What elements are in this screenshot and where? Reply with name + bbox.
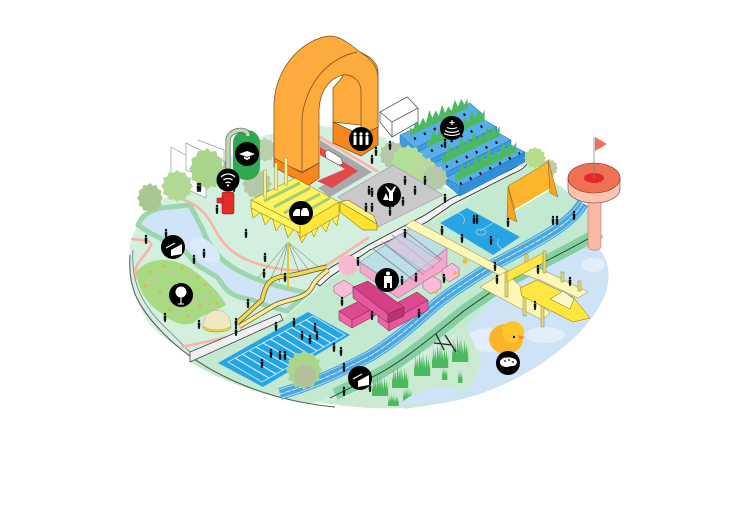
suspension bridge [237, 242, 328, 326]
lake [138, 205, 307, 311]
inlet water [400, 387, 456, 405]
crossing crane birds [434, 334, 456, 352]
road under arch [317, 140, 372, 197]
gray plaza [338, 165, 443, 227]
icon: megaphone near lake [161, 235, 185, 259]
billboard [507, 160, 558, 222]
white house outline [380, 97, 418, 137]
greenhouse [360, 228, 447, 298]
tree by field [286, 350, 322, 390]
yellow boat [520, 280, 590, 322]
people [145, 139, 575, 396]
icon: playground [377, 183, 401, 207]
river bank [330, 232, 600, 398]
red hydrant [217, 192, 234, 214]
marsh reeds [372, 335, 468, 406]
open frames [171, 140, 225, 198]
icon: cars [289, 201, 313, 225]
icon: wine glass [169, 283, 193, 307]
magenta containers [339, 281, 428, 331]
icon: three people [349, 127, 373, 151]
icon: megaphone near marsh [348, 366, 372, 390]
football field [218, 312, 350, 387]
flower garden [136, 260, 226, 324]
running track [278, 200, 585, 398]
pink tree [337, 254, 359, 276]
school bus [340, 200, 377, 230]
water: river and lagoon [370, 238, 609, 409]
pink flowers [434, 258, 468, 294]
terrace planting [410, 91, 520, 184]
island ground [130, 125, 603, 408]
icon: graduation cap [235, 142, 259, 166]
white road strips [190, 157, 528, 362]
orange arch [274, 36, 378, 186]
boardwalk and dock [405, 220, 588, 327]
icon: person statue [375, 268, 399, 292]
icon: wifi [216, 168, 240, 192]
basketball court [440, 208, 520, 255]
yellow factory [251, 178, 339, 243]
factory chimneys [264, 158, 288, 197]
icon: paint palette [496, 351, 520, 375]
pink footpaths [132, 137, 377, 347]
white van [325, 150, 343, 165]
street trees [137, 138, 558, 213]
observation tower with flag [568, 137, 620, 250]
icon: sound waves [440, 116, 464, 140]
small pink pavilions [334, 263, 459, 298]
blue terraced building [400, 103, 525, 196]
rubber duck [489, 321, 525, 354]
green tower with tube [228, 130, 260, 180]
glass dome [203, 310, 231, 332]
